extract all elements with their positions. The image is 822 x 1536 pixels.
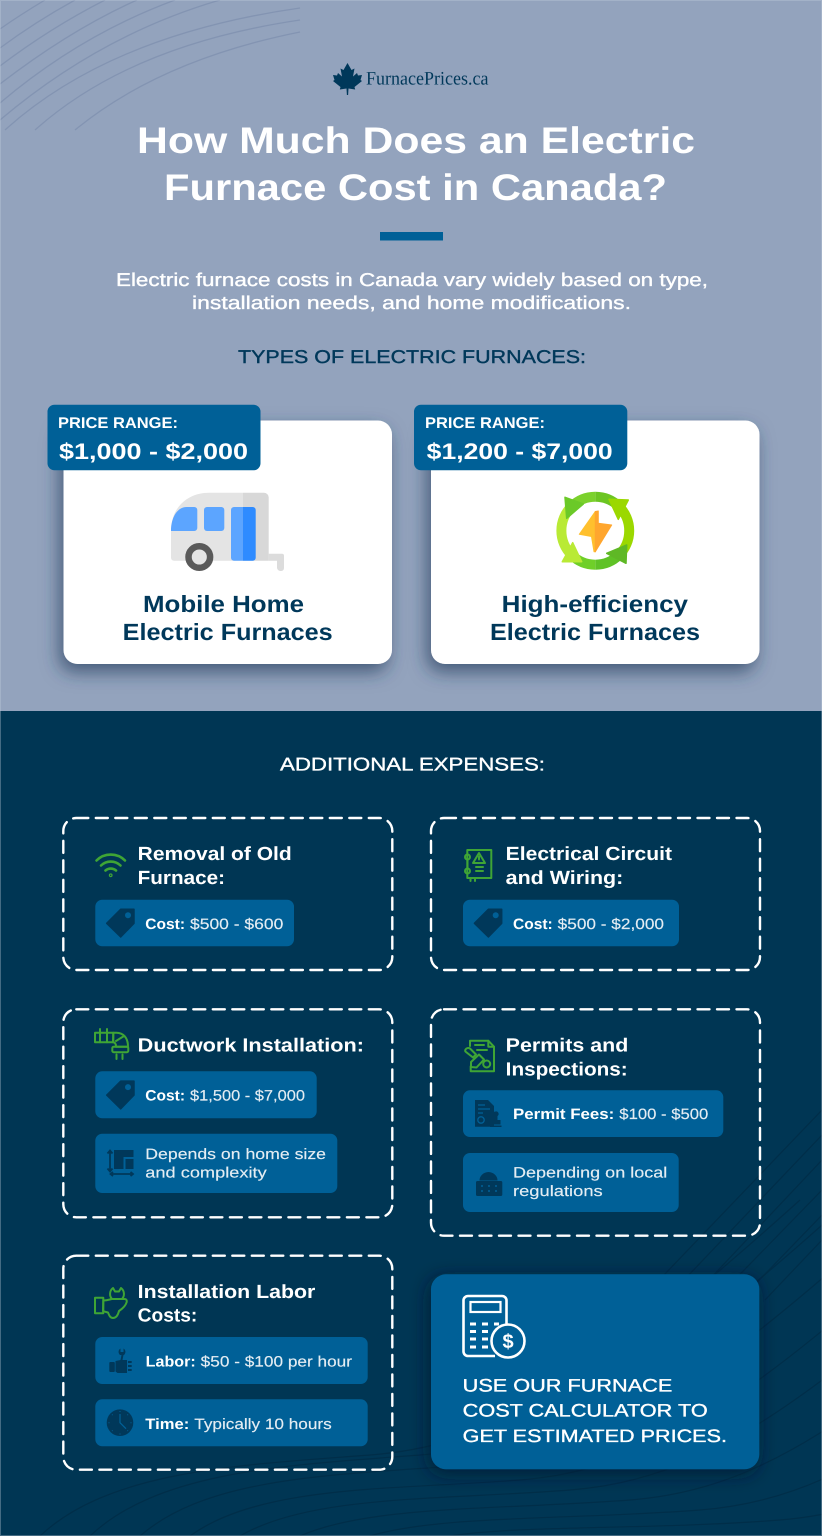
price tag: PRICE RANGE:: [425, 415, 545, 432]
panel: electrical circuit and wiring: [431, 818, 760, 970]
heading: Electrical Circuit: [506, 844, 673, 865]
cost pill: Cost:: [513, 916, 553, 933]
panel: permits and inspections: [431, 1009, 760, 1236]
permit fees pill: $100 - $500: [619, 1106, 708, 1123]
heading: [506, 1036, 628, 1080]
panel: removal of old furnace: [63, 818, 392, 970]
heading: Costs:: [138, 1306, 197, 1327]
dashed border: [63, 1256, 392, 1470]
time pill: Typically 10 hours: [194, 1416, 332, 1433]
callout background: [431, 1274, 759, 1469]
call to action text: USE OUR FURNACE: [463, 1375, 672, 1395]
intro text: Electric furnace costs in Canada vary widely based on type,: [116, 269, 708, 290]
call to action text: [463, 1375, 727, 1446]
title divider: [380, 232, 443, 240]
permit fees pill: [463, 1090, 723, 1137]
heading: [138, 844, 292, 889]
cost pill: $500 - $2,000: [558, 916, 664, 933]
note pill: [95, 1134, 337, 1193]
cost pill: Cost:: [145, 1088, 185, 1105]
dashed border: [63, 1009, 392, 1217]
icon: clock: [107, 1409, 133, 1436]
cost pill: Cost:: [145, 916, 185, 933]
icon: price tag: [474, 909, 502, 937]
price tag: $1,200 - $7,000: [427, 439, 613, 464]
call to action text: GET ESTIMATED PRICES.: [463, 1426, 727, 1446]
icon: government building: [476, 1169, 502, 1196]
icon: maple leaf: [333, 63, 362, 95]
panel: mobile home furnaces: [48, 405, 392, 664]
permit fees pill: Permit Fees:: [513, 1106, 614, 1123]
icon: price tag: [107, 1081, 134, 1109]
call to action text: COST CALCULATOR TO: [463, 1401, 708, 1421]
card background: [431, 420, 760, 664]
cost pill: $500 - $600: [190, 916, 283, 933]
dashed border: [431, 818, 760, 970]
icon: permit document: [465, 1041, 494, 1071]
icon: calculator with dollar coin: [464, 1296, 524, 1358]
heading: Ductwork Installation:: [138, 1036, 364, 1057]
heading: and Wiring:: [506, 868, 623, 889]
intro text: installation needs, and home modifications.: [192, 292, 631, 313]
dashed border: [431, 1009, 760, 1236]
price tag: [414, 405, 627, 470]
title: Furnace Cost in Canada?: [164, 167, 667, 208]
heading: additional expenses: ADDITIONAL EXPENSES:: [280, 754, 545, 774]
title: How Much Does an Electric: [137, 120, 695, 161]
card label: [490, 591, 700, 645]
note pill: Depends on home size: [145, 1146, 326, 1163]
labor pill: $50 - $100 per hour: [201, 1354, 352, 1371]
cost pill: [95, 900, 294, 946]
icon: mobile home trailer: [171, 493, 284, 571]
dashed border: [63, 818, 392, 970]
card label: High-efficiency: [502, 591, 688, 617]
regulations pill: [463, 1153, 679, 1212]
icon: price tag: [107, 909, 134, 937]
icon: electrical panel: [465, 850, 491, 881]
icon: hand with wrench: [95, 1288, 127, 1318]
heading: [138, 1282, 316, 1327]
regulations pill: regulations: [513, 1183, 603, 1200]
icon: hand holding wrench: [109, 1348, 132, 1373]
card label: Mobile Home: [143, 591, 304, 617]
panel: high-efficiency furnaces: [414, 405, 760, 664]
price tag: PRICE RANGE:: [58, 415, 178, 432]
price tag: $1,000 - $2,000: [59, 439, 248, 464]
intro text: [116, 269, 708, 313]
card background: [64, 420, 392, 664]
icon: floor plan: [108, 1150, 134, 1176]
heading: types of electric furnaces: TYPES OF ELECTRIC FURNACES:: [238, 346, 586, 367]
heading: Permits and: [506, 1036, 628, 1057]
heading: Removal of Old: [138, 844, 292, 865]
panel: calculator call to action: [431, 1274, 759, 1469]
time pill: Time:: [145, 1416, 189, 1433]
logo wordmark: FurnacePrices.ca: [366, 68, 489, 90]
icon: wifi signal: [96, 855, 125, 876]
panel: installation labor costs: [63, 1256, 392, 1470]
logo: [333, 63, 489, 95]
heading: Installation Labor: [138, 1282, 316, 1303]
labor pill: [95, 1337, 368, 1384]
icon: recycling energy bolt: [561, 497, 629, 565]
heading: Inspections:: [506, 1059, 628, 1080]
card label: Electric Furnaces: [123, 619, 333, 645]
panel: ductwork installation: [63, 1009, 392, 1217]
time pill: [95, 1399, 368, 1446]
title: [137, 120, 695, 208]
icon: calculator with dollar coin: $: [502, 1331, 514, 1353]
note pill: and complexity: [145, 1165, 267, 1182]
labor pill: Labor:: [146, 1354, 196, 1371]
card label: [123, 591, 333, 645]
heading: Furnace:: [138, 868, 225, 889]
cost pill: [95, 1071, 317, 1118]
cost pill: $1,500 - $7,000: [190, 1088, 305, 1105]
price tag: [48, 405, 260, 470]
icon: stamped document: [475, 1100, 502, 1127]
bottom section background: [0, 711, 822, 1536]
cost pill: [463, 900, 679, 946]
regulations pill: Depending on local: [513, 1165, 667, 1182]
heading: [506, 844, 673, 889]
top section background: [0, 0, 822, 711]
card label: Electric Furnaces: [490, 619, 700, 645]
icon: duct pipe: [95, 1029, 128, 1059]
